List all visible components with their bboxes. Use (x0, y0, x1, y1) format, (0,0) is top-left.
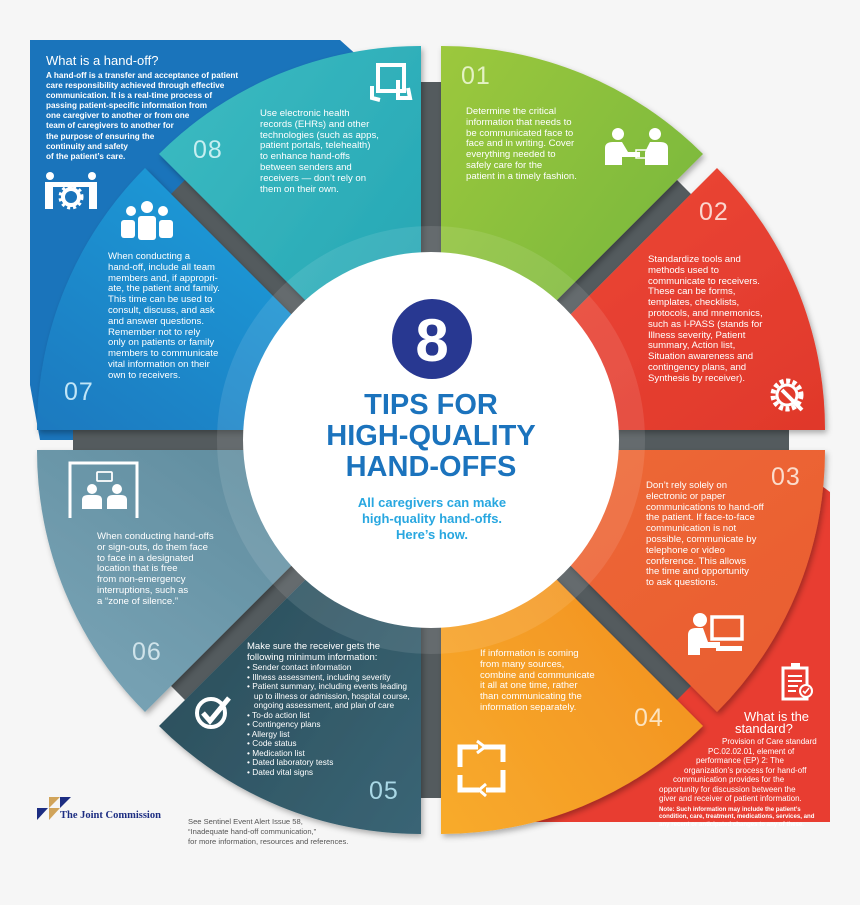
text: tip 02: templates, checklists, (648, 297, 739, 308)
text: tip 08: patient portals, telehealth) (260, 140, 370, 151)
text: tip 08: receivers — don’t rely on (260, 173, 366, 184)
text: tip 01: Determine the critical (466, 106, 556, 117)
segment 07 (37, 168, 407, 430)
text: tip 02: Illness severity, Patient (648, 330, 745, 341)
text: tip 05: following minimum information: (247, 652, 377, 663)
text: tip 02: Synthesis by receiver). (648, 373, 745, 384)
icon: framed people (70, 463, 137, 518)
text: tip 01 (466, 106, 577, 182)
number 02: 02 (699, 198, 729, 226)
text: what is the standard: Provision of Care standard (722, 737, 817, 746)
text: what is the standard: opportunity for discussion between the (659, 784, 796, 794)
text: tip 01: safely care for the (466, 160, 542, 171)
number 08: 08 (193, 136, 223, 164)
text: what is a hand-off: one caregiver to another or from one (46, 111, 189, 120)
text: what is the standard: giver and receiver of patient information. (659, 794, 802, 803)
segment 04 (441, 464, 703, 834)
icon: hand-off people with gear (45, 172, 97, 209)
icon: team of three (121, 201, 173, 240)
text: tip 05: • Illness assessment, including severity (247, 672, 391, 682)
text: what is the standard (659, 709, 817, 828)
number 01: 01 (461, 62, 491, 90)
center white circle (243, 252, 619, 628)
text: tip 05 (247, 641, 410, 776)
number 05: 05 (369, 777, 399, 805)
text: tip 02: summary, Action list, (648, 340, 735, 351)
text: tip 06 (97, 531, 214, 607)
text: tip 04: If information is coming (480, 648, 579, 659)
text: tip 07: consult, discuss, and ask (108, 305, 215, 316)
text: what is a hand-off: of the patient’s care. (46, 152, 125, 161)
text: what is a hand-off: team of caregivers to another for (46, 121, 174, 130)
text: tip 06: a “zone of silence.” (97, 596, 178, 607)
text: tip 02: Situation awareness and (648, 351, 753, 362)
icon: person at computer (688, 613, 742, 655)
text: tip 01: patient in a timely fashion. (466, 171, 577, 182)
text: what is a hand-off: communication. It is a real-time process of (46, 91, 212, 100)
text: tip 03: communication is not (646, 523, 736, 534)
text: what is a hand-off: What is a hand-off? (46, 53, 158, 68)
footer note: for more information, resources and references. (188, 837, 348, 846)
text: tip 03: conference. This allows (646, 556, 746, 567)
text: what is the standard: organization’s process for hand-off (684, 766, 806, 774)
title: TIPS FOR (364, 389, 498, 421)
subtitle: high-quality hand-offs. (362, 511, 502, 526)
text: tip 04: it all at one time, rather (480, 680, 578, 691)
icon: tablet with hands (372, 65, 410, 100)
text: tip 05: ongoing assessment, and plan of care (254, 700, 394, 710)
text: what is a hand-off (46, 53, 238, 161)
segment 08 (159, 46, 421, 416)
text: tip 02: contingency plans, and (648, 362, 746, 373)
text: tip 06: or sign-outs, do them face (97, 542, 208, 553)
text: tip 02: methods used to (648, 265, 719, 276)
text: tip 05: Make sure the receiver gets the (247, 641, 380, 652)
text: what is a hand-off: continuity and safety (46, 142, 128, 151)
footer note (188, 817, 348, 846)
text: what is the standard: performance (EP) 2: The (696, 756, 784, 765)
text: tip 03: Don’t rely solely on (646, 480, 727, 491)
text: what is a hand-off: the purpose of ensuring the (46, 132, 154, 141)
icon: arrows square (460, 741, 503, 796)
number 07: 07 (64, 378, 94, 406)
text: tip 02: Standardize tools and (648, 254, 741, 265)
icon: gear with wrench (773, 381, 802, 410)
text: tip 05: • To-do action list (247, 710, 310, 720)
gray spokes (73, 82, 789, 798)
text: tip 07: When conducting a (108, 251, 190, 262)
text: tip 07: hand-off, include all team (108, 262, 215, 273)
text: tip 02 (648, 254, 763, 384)
number 06: 06 (132, 638, 162, 666)
number 04: 04 (634, 704, 664, 732)
text: tip 04 (480, 648, 595, 713)
text: tip 02: These can be forms, (648, 286, 735, 297)
text: what is the standard: What is the (744, 709, 809, 724)
text: tip 05: • Dated laboratory tests (247, 757, 333, 767)
text: tip 01: everything needed to (466, 149, 556, 160)
text: tip 01: be communicated face to (466, 128, 573, 139)
text: tip 05: • Sender contact information (247, 662, 351, 672)
text: what is the standard: communication provides for the (673, 775, 784, 784)
text: tip 08: Use electronic health (260, 108, 350, 119)
text: tip 03: to ask questions. (646, 577, 718, 588)
subtitle: Here’s how. (396, 527, 468, 542)
title: HIGH-QUALITY (326, 420, 536, 452)
segment 01 (441, 46, 703, 416)
text: tip 07: members and, if appropri- (108, 273, 218, 284)
panel: what is a hand-off background (30, 40, 440, 440)
text: tip 03: the patient. If face-to-face (646, 512, 755, 523)
text: tip 08: between senders and (260, 162, 352, 173)
icon: clipboard (783, 663, 812, 699)
text: what is a hand-off: care responsibility achieved through effective (46, 81, 224, 90)
text: tip 02: communicate to receivers. (648, 276, 760, 287)
text: tip 04: information separately. (480, 702, 576, 713)
text: tip 02: protocols, and mnemonics, (648, 308, 763, 319)
text: tip 07: only on patients or family (108, 337, 214, 348)
footer note: “Inadequate hand-off communication,” (188, 827, 316, 836)
logo: joint commission (37, 797, 161, 821)
text: tip 06: When conducting hand-offs (97, 531, 214, 542)
title: HAND-OFFS (346, 451, 516, 483)
badge: 8 (392, 299, 472, 379)
text: tip 03: electronic or paper (646, 491, 725, 502)
text: tip 08 (260, 108, 379, 195)
text: tip 06: interruptions, such as (97, 585, 188, 596)
text: tip 06: location that is free (97, 563, 178, 574)
text: tip 08: them on their own. (260, 184, 339, 195)
text: tip 06: to face in a designated (97, 553, 194, 564)
footer note: See Sentinel Event Alert Issue 58, (188, 817, 303, 826)
text: tip 03 (646, 480, 764, 588)
text: tip 07: Remember not to rely (108, 327, 200, 338)
text: tip 06: from non-emergency (97, 574, 186, 585)
text: tip 05: up to illness or admission, hospital course, (254, 690, 410, 700)
panel: standard background (520, 462, 830, 822)
title (326, 389, 536, 483)
badge: 8: 8 (415, 307, 449, 374)
text: tip 05: • Dated vital signs (247, 766, 313, 776)
text: tip 03: telephone or video (646, 545, 725, 556)
segment 03 (455, 450, 825, 712)
text: tip 03: possible, communicate by (646, 534, 756, 545)
text: tip 07: ate, the patient and family. (108, 283, 220, 294)
text: what is the standard: standard? (735, 721, 793, 736)
text: tip 01: information that needs to (466, 117, 572, 128)
text: tip 05: • Code status (247, 738, 296, 748)
icon: two people at desk (605, 128, 668, 165)
text: what is the standard: condition, care, treatment, medications, services, and (659, 813, 814, 820)
text: tip 01: face and in writing. Cover (466, 138, 574, 149)
text: tip 08: to enhance hand-offs (260, 151, 350, 162)
text: tip 05: • Patient summary, including events leading (247, 681, 407, 691)
subtitle: All caregivers can make (358, 495, 506, 510)
text: tip 07: This time can be used to (108, 294, 213, 305)
text: what is a hand-off: A hand-off is a transfer and acceptance of patient (46, 71, 238, 80)
text: tip 04: than communicating the (480, 691, 582, 702)
text: tip 02: such as I-PASS (stands for (648, 319, 762, 330)
text: tip 07: own to receivers. (108, 370, 181, 381)
text: tip 03: the time and opportunity (646, 566, 749, 577)
subtitle (358, 495, 506, 542)
text: tip 08: records (EHRs) and other (260, 119, 369, 130)
number 03: 03 (771, 463, 801, 491)
segment 05 (159, 464, 421, 834)
text: what is the standard: any recent or anticipated changes to any of these. (659, 821, 804, 828)
segment 06 (37, 450, 407, 712)
text: tip 03: communications to hand-off (646, 502, 764, 513)
text: tip 04: combine and communicate (480, 670, 595, 681)
text: tip 07: members to communicate (108, 348, 218, 359)
text: what is the standard: Note: Such information may include the patient’s (659, 806, 801, 813)
icon: check circle (197, 698, 229, 727)
text: tip 04: from many sources, (480, 659, 564, 670)
text: tip 07 (108, 251, 220, 381)
text: what is a hand-off: passing patient-specific information from (46, 101, 207, 110)
text: tip 05: • Contingency plans (247, 719, 320, 729)
segment 02 (455, 168, 825, 430)
text: tip 08: technologies (such as apps, (260, 130, 379, 141)
logo: joint commission: The Joint Commission (60, 810, 161, 821)
text: tip 05: • Allergy list (247, 728, 290, 738)
text: tip 05: • Medication list (247, 748, 305, 758)
text: what is the standard: PC.02.02.01, element of (708, 746, 794, 756)
text: tip 07: and answer questions. (108, 316, 204, 327)
text: tip 07: vital information on their (108, 359, 210, 370)
